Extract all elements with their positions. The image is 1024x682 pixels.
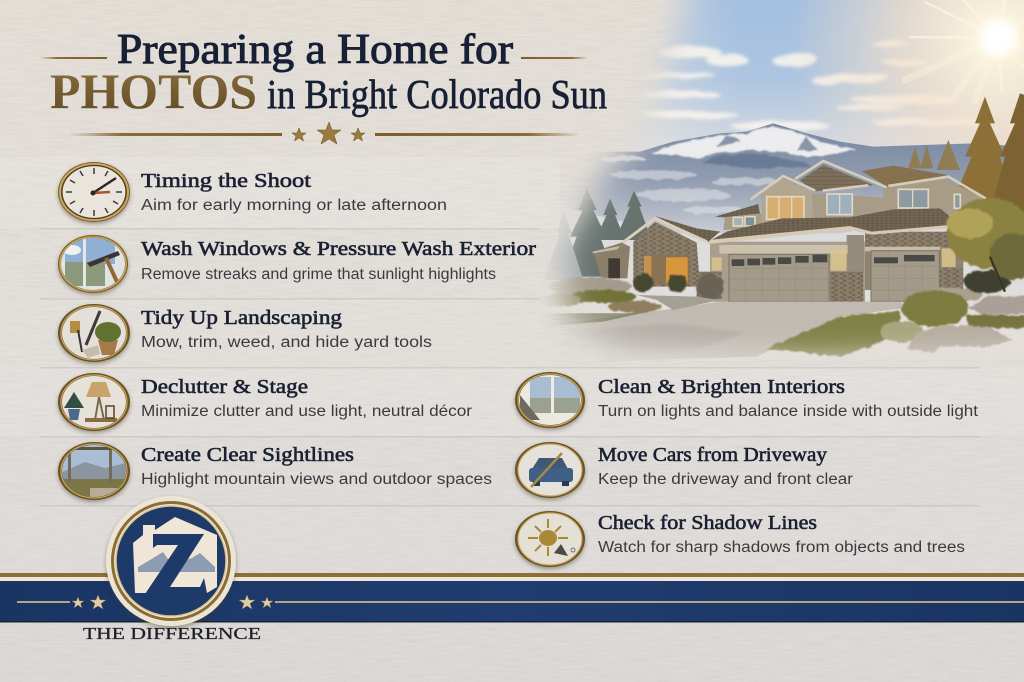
item: check for shadow lines [515, 511, 965, 567]
lawn [767, 311, 900, 357]
description: Remove streaks and grime that sunlight highlights [141, 266, 496, 283]
icon: sun and shadow [515, 511, 585, 567]
heading: Wash Windows & Pressure Wash Exterior [141, 238, 536, 260]
entry gable [633, 222, 700, 287]
icon: window washing [58, 235, 128, 293]
upper windows [733, 189, 960, 226]
description: Watch for sharp shadows from objects and trees [598, 539, 965, 556]
item: move cars from driveway [515, 442, 853, 498]
mountain [572, 123, 1005, 234]
sun rays [902, 0, 1019, 91]
heading: Move Cars from Driveway [598, 444, 828, 466]
icon: lamp and plant [58, 373, 130, 431]
heading: Create Clear Sightlines [141, 444, 354, 466]
trees [543, 93, 1024, 280]
icon: clock [58, 162, 130, 222]
title line 2: in Bright Colorado Sun: in Bright Colorado Sun [267, 71, 607, 117]
heading: Clean & Brighten Interiors [598, 376, 845, 398]
heading: Check for Shadow Lines [598, 512, 817, 534]
shrubs [540, 270, 1010, 342]
item: tidy up landscaping [58, 304, 432, 362]
gables trim [751, 161, 986, 199]
driveway [540, 302, 902, 363]
stone columns [697, 268, 963, 302]
rocks [907, 295, 1024, 353]
item: clean and brighten interiors [515, 372, 979, 428]
icon: car with slash [515, 442, 585, 498]
icon: yard tools and plant [58, 304, 130, 362]
heading: Tidy Up Landscaping [141, 307, 342, 329]
tree right [947, 198, 1024, 292]
description: Mow, trim, weed, and hide yard tools [141, 334, 432, 351]
item: timing the shoot [58, 162, 447, 222]
glowing entry [644, 255, 689, 283]
lower walls [710, 242, 865, 302]
description: Keep the driveway and front clear [598, 471, 853, 488]
garage doors [729, 251, 939, 302]
heading: Timing the Shoot [141, 170, 311, 192]
item: create clear sightlines [58, 442, 492, 500]
item: wash windows [58, 235, 536, 293]
description: Turn on lights and balance inside with outside light [598, 403, 979, 420]
house [593, 161, 986, 302]
description: Highlight mountain views and outdoor spaces [141, 471, 492, 488]
title line 1: Preparing a Home for [117, 27, 513, 73]
title [40, 27, 607, 144]
banner stars [72, 595, 273, 609]
item: declutter and stage [58, 373, 472, 431]
title flourish lines and stars [40, 57, 588, 144]
title line 2: PHOTOS: PHOTOS [50, 63, 257, 119]
heading: Declutter & Stage [141, 376, 308, 398]
description: Aim for early morning or late afternoon [141, 197, 447, 214]
lower roof [708, 208, 961, 243]
upper walls [715, 165, 985, 230]
icon: bright interior [515, 372, 585, 428]
brand tagline: THE DIFFERENCE [83, 624, 261, 643]
hero photo: house, mountain and sun [540, 0, 1024, 363]
description: Minimize clutter and use light, neutral décor [141, 403, 472, 420]
logo: Z house emblem [106, 496, 236, 626]
footer banner [0, 573, 1024, 622]
icon: mountain view window [58, 442, 130, 500]
sky with clouds [586, 0, 1024, 346]
